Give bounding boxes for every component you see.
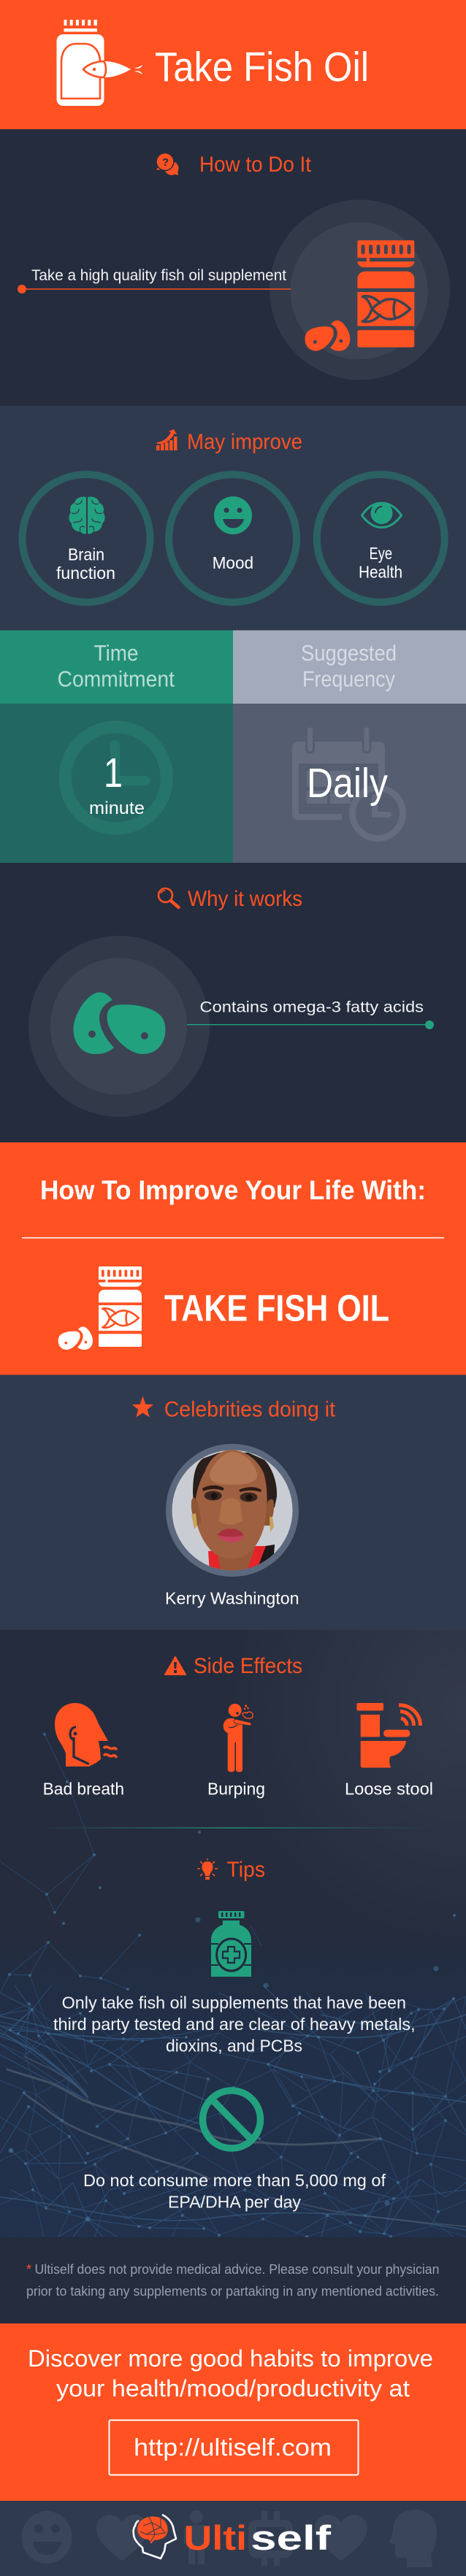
heading: suggested frequency: Frequency: [302, 666, 395, 692]
value: daily: Daily: [307, 760, 388, 807]
icon: star: [132, 1396, 153, 1418]
heading: May improve: [187, 430, 302, 454]
icon: rising chart: [156, 429, 177, 450]
icon: fish oil bottle with fish: [57, 20, 142, 106]
benefit: mood: Mood: [213, 553, 253, 572]
text: tip two: EPA/DHA per day: [168, 2193, 301, 2212]
panel: call to action: [0, 2323, 466, 2501]
panel: time commitment: [0, 631, 233, 863]
benefit: eye health: [317, 474, 445, 602]
value: 1 minute: [89, 750, 145, 818]
text: tip two: [83, 2171, 386, 2212]
text: disclaimer: prior to taking any supplements or partaking in any mentioned activities.: [26, 2284, 439, 2299]
title: Take Fish Oil: [155, 44, 369, 91]
network pattern: [0, 1734, 466, 2237]
name: Kerry Washington: [165, 1588, 299, 1607]
text: tip one: Only take fish oil supplements that have been: [62, 1993, 406, 2012]
text: tip one: [53, 1993, 416, 2056]
heading: How to Do It: [199, 153, 312, 177]
text: call to action: your health/mood/productivity at: [56, 2375, 410, 2402]
heading: tips: Tips: [226, 1858, 265, 1882]
background circles: [28, 936, 210, 1117]
icon: supplement bottle: [211, 1911, 251, 1977]
benefit: brain function: [22, 474, 150, 602]
benefit: eye health: Eye: [370, 544, 392, 563]
icon: clock: [65, 727, 167, 828]
callout line: [18, 285, 291, 293]
panel: celebrities: [0, 1375, 466, 1630]
benefit: brain function: function: [56, 564, 115, 583]
heading: How To Improve Your Life With:: [40, 1175, 426, 1205]
panel: why it works: [0, 863, 466, 1142]
side effect: loose stool: [345, 1703, 433, 1799]
callout line: [187, 1020, 434, 1029]
text: disclaimer: Ultiself does not provide medical advice. Please consult your physician: [35, 2262, 440, 2277]
side effect: loose stool: Loose stool: [345, 1780, 433, 1799]
benefit: brain function: Brain: [68, 545, 104, 564]
heading: Celebrities doing it: [164, 1398, 336, 1422]
button: website link: [110, 2421, 358, 2475]
icon: fish oil bottle: [357, 240, 414, 347]
text: tip one: third party tested and are clear of heavy metals,: [53, 2015, 416, 2034]
background circles: [270, 200, 450, 380]
text: how to: Take a high quality fish oil supplement: [31, 267, 286, 284]
logo: Ultiself: Ulti: [184, 2518, 247, 2557]
panel: may improve: [0, 406, 466, 631]
heading: side effects: Side Effects: [194, 1654, 302, 1678]
icon: calendar with clock: [292, 726, 403, 838]
icon: question speech bubbles: ?: [162, 156, 169, 169]
heading: time commitment: Time: [94, 640, 139, 666]
logo: Ultiself: self: [251, 2518, 331, 2557]
icon: capsules: [73, 993, 165, 1054]
heading: time commitment: Commitment: [57, 666, 175, 692]
benefit: eye health: Health: [359, 563, 402, 582]
panel: header: [0, 0, 466, 129]
text: disclaimer: *: [26, 2262, 31, 2277]
icon: light bulb: [197, 1858, 218, 1880]
icon: capsules: [305, 320, 350, 351]
value: 1 minute: 1: [104, 750, 123, 796]
text: call to action: [28, 2345, 433, 2402]
text: reason: Contains omega-3 fatty acids: [200, 999, 424, 1016]
icon: prohibited sign: [203, 2091, 260, 2148]
portrait: Kerry Washington: [166, 1444, 299, 1577]
side effect: bad breath: Bad breath: [43, 1780, 124, 1799]
text: tip one: dioxins, and PCBs: [166, 2037, 302, 2056]
heading: Why it works: [188, 887, 302, 911]
icon: warning triangle: [165, 1657, 186, 1675]
benefit: mood: [169, 474, 297, 602]
icon: question speech bubbles: [156, 153, 178, 175]
heading: time commitment: [57, 640, 175, 692]
icon: capsules white: [58, 1327, 93, 1350]
panel: footer: [0, 2501, 466, 2576]
heading: suggested frequency: Suggested: [301, 640, 397, 666]
text: tip two: Do not consume more than 5,000 mg of: [83, 2171, 386, 2190]
text: disclaimer: [26, 2262, 440, 2299]
watermark icons: [22, 2510, 437, 2567]
panel: how to improve banner: [0, 1142, 466, 1375]
value: 1 minute: minute: [89, 799, 145, 818]
panel: disclaimer: [0, 2237, 466, 2323]
side effect: burping: Burping: [207, 1780, 265, 1799]
title: take fish oil: TAKE FISH OIL: [164, 1288, 389, 1329]
text: call to action: Discover more good habits to improve: [28, 2345, 433, 2372]
heading: suggested frequency: [301, 640, 397, 692]
panel: how to do it: [0, 129, 466, 406]
panel: side effects and tips background: [0, 1630, 466, 2237]
side effect: burping: [207, 1704, 265, 1799]
side effect: bad breath: [43, 1703, 124, 1799]
button: website link: http://ultiself.com: [134, 2434, 332, 2461]
icon: fish oil bottle white: [99, 1266, 142, 1347]
panel: suggested frequency: [233, 631, 466, 863]
icon: magnifier: [158, 888, 178, 907]
logo: Ultiself: [134, 2515, 331, 2558]
